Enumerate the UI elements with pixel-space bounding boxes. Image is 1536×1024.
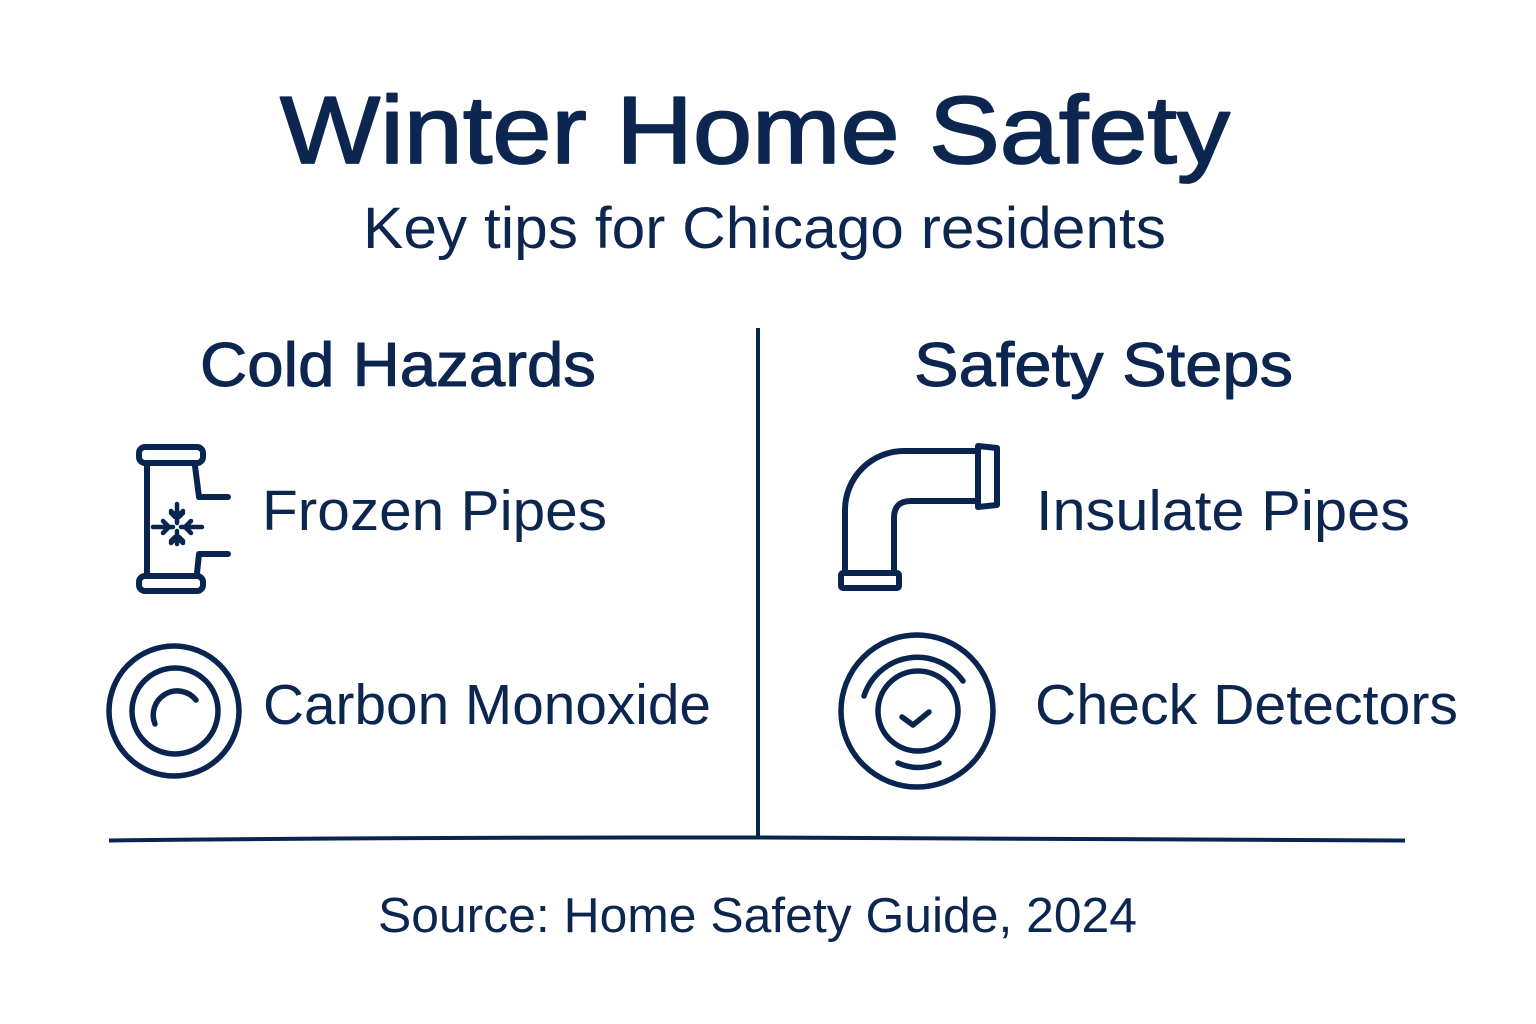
icon: checked detector	[841, 635, 993, 787]
heading: safety steps: Safety Steps	[914, 331, 1293, 400]
icon: frozen pipe	[139, 447, 228, 591]
icon: insulated pipe elbow	[841, 446, 997, 588]
heading: cold hazards: Cold Hazards	[200, 331, 596, 400]
source note: Source: Home Safety Guide, 2024	[378, 889, 1137, 943]
icon: carbon monoxide detector	[109, 646, 239, 776]
label: frozen pipes: Frozen Pipes	[262, 479, 607, 543]
title: Winter Home Safety	[280, 77, 1230, 184]
label: check detectors: Check Detectors	[1035, 673, 1458, 737]
subtitle: Key tips for Chicago residents	[363, 196, 1166, 261]
label: insulate pipes: Insulate Pipes	[1036, 479, 1410, 543]
label: carbon monoxide: Carbon Monoxide	[263, 673, 711, 737]
